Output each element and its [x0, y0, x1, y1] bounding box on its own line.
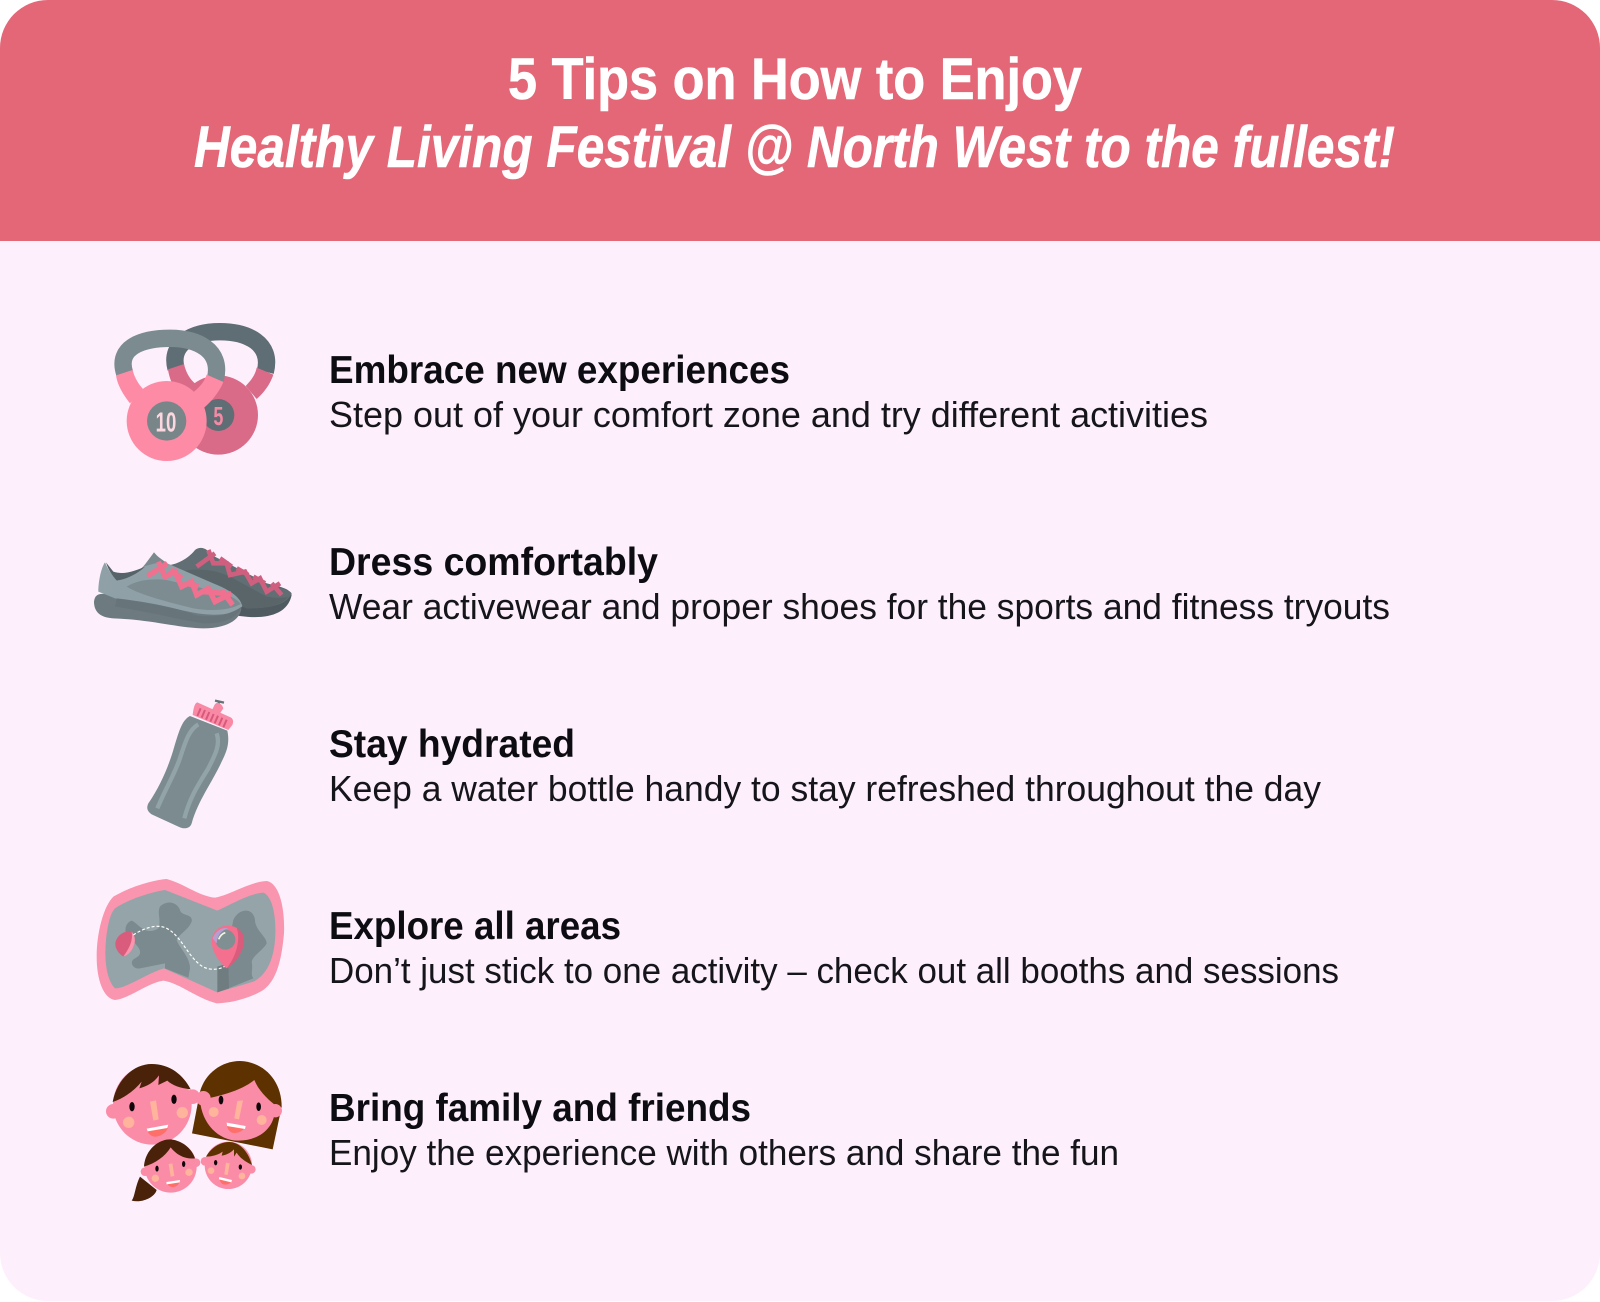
heading: tip 4: Explore all areas: [329, 905, 621, 948]
mother: [192, 1061, 282, 1149]
icon: family faces: [106, 1061, 282, 1201]
heading: tip 5: Bring family and friends: [329, 1087, 751, 1130]
heading: tip 2: Dress comfortably: [329, 541, 659, 584]
icon: sports shoes: [94, 548, 292, 628]
father: [106, 1064, 200, 1145]
text: tip 1: Step out of your comfort zone and try different activities: [329, 394, 1208, 435]
header banner: [0, 0, 1600, 241]
son: [201, 1142, 256, 1189]
text: tip 5: Enjoy the experience with others and share the fun: [329, 1132, 1119, 1173]
text: tip 3: Keep a water bottle handy to stay refreshed throughout the day: [329, 768, 1321, 809]
text: tip 2: Wear activewear and proper shoes for the sports and fitness tryouts: [329, 586, 1390, 627]
icon: kettlebells: [116, 332, 273, 461]
title line 2: Healthy Living Festival @ North West to the fullest!: [194, 115, 1395, 180]
text: tip 4: Don’t just stick to one activity – check out all booths and sessions: [329, 950, 1339, 991]
icon: kettlebells: 10: [156, 407, 176, 438]
daughter: [132, 1139, 200, 1201]
heading: tip 3: Stay hydrated: [329, 723, 575, 766]
heading: tip 1: Embrace new experiences: [329, 349, 790, 392]
icon: water bottle: [147, 701, 233, 828]
icon: kettlebells: 5: [213, 401, 223, 431]
title line 1: 5 Tips on How to Enjoy: [508, 47, 1082, 112]
icon: map with pin: [97, 879, 284, 1003]
